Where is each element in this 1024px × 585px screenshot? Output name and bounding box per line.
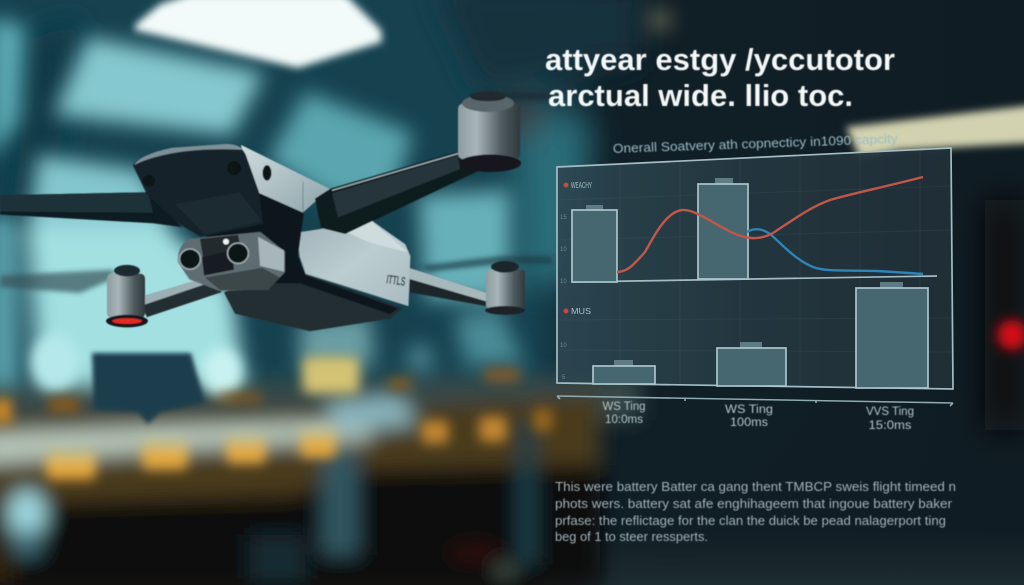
x axis label 3 xyxy=(866,406,914,432)
x axis label 2 xyxy=(725,404,773,429)
x axis label 3: 15:0ms xyxy=(868,420,912,432)
title xyxy=(545,42,895,113)
dark top lid xyxy=(134,144,262,236)
left rear motor xyxy=(106,265,148,327)
right rear motor xyxy=(485,261,525,315)
chart panel xyxy=(557,148,953,389)
black frame between lid and body xyxy=(205,191,398,314)
y axis ticks xyxy=(560,215,567,381)
upper legend xyxy=(564,180,592,190)
x axis label 1 xyxy=(602,401,646,426)
propeller blur: left rear xyxy=(0,270,114,293)
description paragraph: phots wers. battery sat afe enghihageem that ingoue battery baker xyxy=(555,497,952,511)
y axis ticks: 10 xyxy=(560,343,567,349)
drone xyxy=(0,90,552,330)
right front motor xyxy=(458,92,521,172)
underbelly xyxy=(226,274,400,330)
y axis ticks: 5 xyxy=(562,375,566,381)
upper chart baseline xyxy=(572,276,937,282)
blue line xyxy=(747,229,923,274)
y axis ticks: 15 xyxy=(560,215,567,221)
red line xyxy=(617,177,923,272)
battery bar 2 xyxy=(698,178,748,279)
right lens xyxy=(228,243,248,263)
red status light xyxy=(112,318,142,324)
description paragraph: This were battery Batter ca gang thent TMBCP sweis flight timeed n xyxy=(555,480,956,494)
laptop silhouette xyxy=(92,353,205,424)
light upper wedge xyxy=(241,145,331,213)
right rear arm xyxy=(408,268,499,308)
battery bar 3 xyxy=(593,360,655,384)
y axis ticks: 10 xyxy=(560,279,567,285)
chart subtitle: Onerall Soatvery ath copnecticy in1090 capcity xyxy=(613,132,899,156)
sensor dot xyxy=(262,165,272,181)
description paragraph: prfase: the reflictage for the clan the duick be pead nalagerport ting xyxy=(555,514,946,528)
battery bar 4 xyxy=(717,342,786,386)
lower legend: MUS xyxy=(571,306,591,316)
propeller blur: right rear xyxy=(420,256,552,272)
title: attyear estgy /yccutotor xyxy=(545,42,895,77)
right front arm xyxy=(316,153,480,233)
lower legend xyxy=(564,306,591,316)
y axis ticks: 10 xyxy=(560,247,567,253)
left front arm xyxy=(0,192,182,227)
left lens xyxy=(180,249,200,269)
battery bar 5 xyxy=(856,282,928,388)
x axis label 1: 10:0ms xyxy=(605,414,643,426)
x axis label 1: WS Ting xyxy=(602,401,646,413)
title: arctual wide. llio toc. xyxy=(548,78,853,113)
camera gimbal xyxy=(179,233,284,290)
x axis label 2: WS Ting xyxy=(725,404,773,416)
description paragraph: beg of 1 to steer ressperts. xyxy=(555,530,708,544)
x axis label 2: 100ms xyxy=(730,417,768,429)
battery bar 1 xyxy=(572,205,617,282)
x axis label 3: VVS Ting xyxy=(866,406,914,418)
x axis xyxy=(557,396,953,406)
upper legend: WEACHY xyxy=(571,180,592,190)
description paragraph xyxy=(555,480,956,544)
left rear arm xyxy=(138,278,222,317)
propeller blur: right front xyxy=(480,90,552,103)
main lower body xyxy=(298,221,410,306)
body marking: ITTLS xyxy=(386,272,407,289)
